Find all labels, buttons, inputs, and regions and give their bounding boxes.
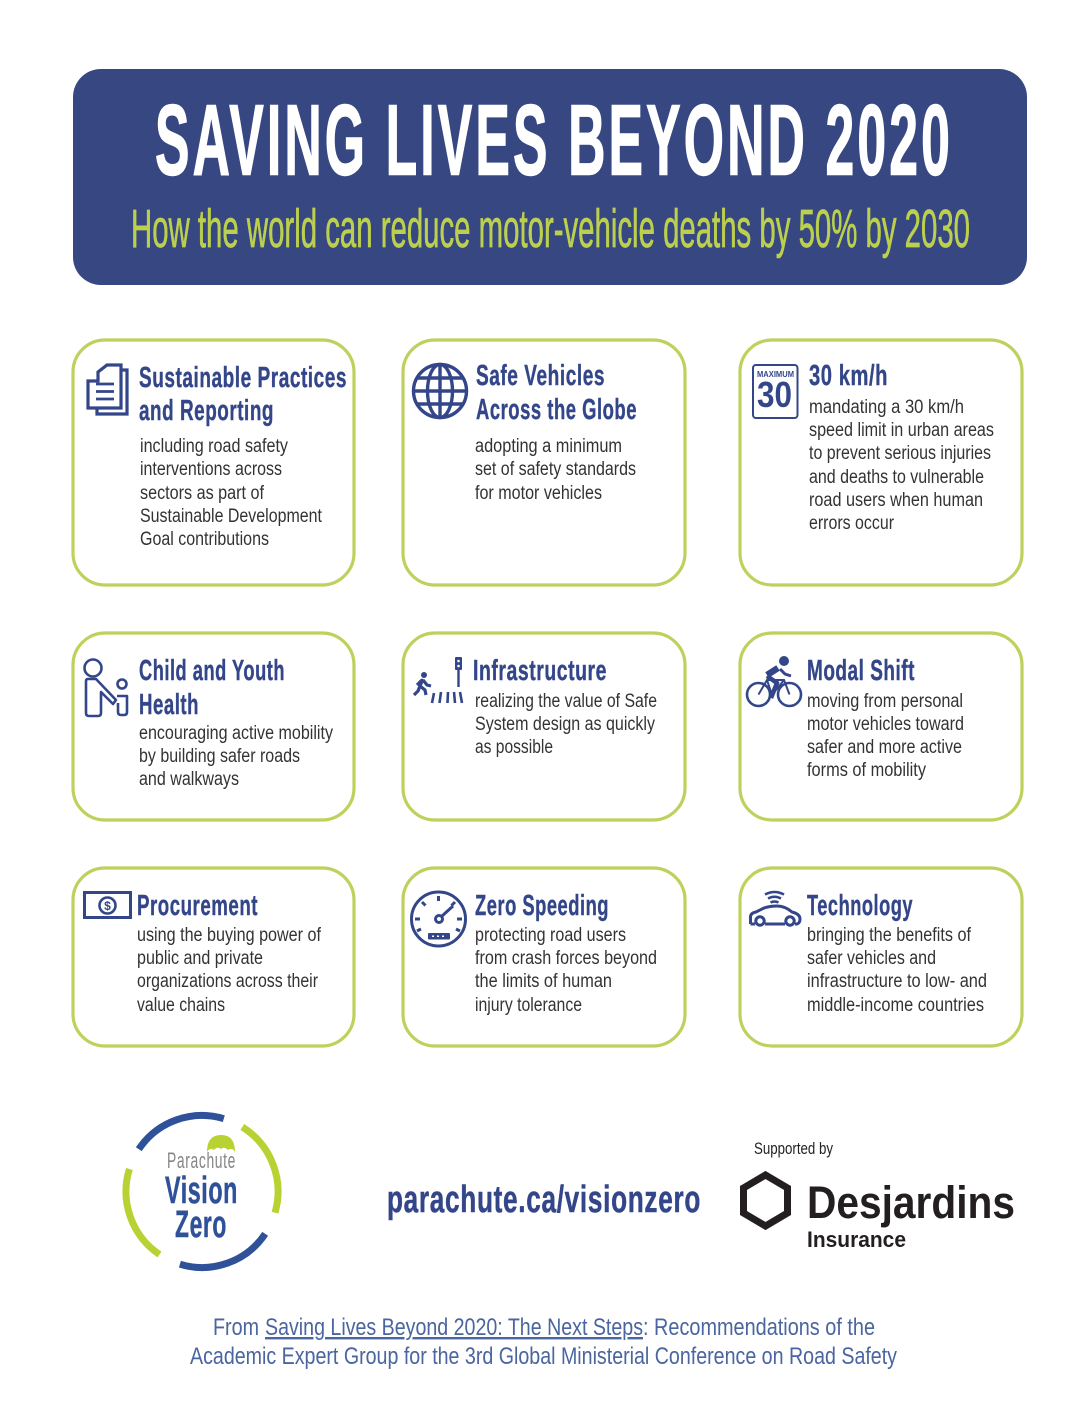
body text: forms of mobility (807, 760, 926, 781)
logo: Parachute Vision Zero (126, 1115, 278, 1268)
body text (475, 436, 636, 504)
body text (809, 397, 994, 534)
heading: Procurement (137, 890, 258, 922)
body text: infrastructure to low- and (807, 971, 987, 992)
body text: speed limit in urban areas (809, 420, 994, 441)
sponsor: Desjardins Insurance: Insurance (807, 1227, 906, 1252)
body text: injury tolerance (475, 995, 582, 1016)
source citation (190, 1314, 897, 1370)
heading: Technology (807, 890, 913, 922)
heading: Safe Vehicles (476, 360, 605, 392)
panel: modal shift (740, 633, 1022, 820)
panel: infrastructure (403, 633, 685, 820)
body text: realizing the value of Safe (475, 691, 657, 712)
source citation: From (213, 1314, 259, 1341)
heading: Health (139, 689, 199, 721)
icon: banknote: $ (104, 899, 111, 913)
body text: interventions across (140, 459, 282, 480)
heading (139, 655, 285, 721)
body text: for motor vehicles (475, 483, 602, 504)
icon: documents (88, 365, 127, 414)
panel: zero speeding (403, 868, 685, 1046)
icon: maximum 30 sign: MAXIMUM (757, 370, 794, 379)
body text: organizations across their (137, 971, 319, 992)
icon: speedometer (412, 892, 466, 946)
body text (139, 723, 333, 790)
logo: Parachute Vision Zero: Zero (175, 1204, 227, 1246)
logo: Parachute Vision Zero: Vision (165, 1170, 238, 1212)
heading: and Reporting (139, 395, 274, 427)
body text: adopting a minimum (475, 436, 622, 457)
logo: Parachute Vision Zero: Parachute (167, 1148, 236, 1173)
heading: Infrastructure (473, 655, 607, 687)
source citation: Saving Lives Beyond 2020: The Next Steps (265, 1314, 643, 1341)
body text: and deaths to vulnerable (809, 467, 984, 488)
panel: sustainable practices and reporting (73, 340, 354, 585)
icon: maximum 30 sign (753, 365, 798, 418)
body text (140, 436, 323, 550)
heading (139, 362, 347, 427)
heading (476, 360, 637, 426)
source citation: Academic Expert Group for the 3rd Global Ministerial Conference on Road Safety (190, 1343, 897, 1370)
panel: 30 km/h (740, 340, 1022, 585)
body text (807, 925, 987, 1016)
body text: safer and more active (807, 737, 962, 758)
body text: the limits of human (475, 971, 612, 992)
icon: cyclist (747, 656, 801, 706)
panel: safe vehicles across the globe (403, 340, 685, 585)
icon: globe (413, 364, 467, 418)
icon: pedestrian crossing and signal (414, 657, 462, 703)
website link: parachute.ca/visionzero (387, 1179, 701, 1221)
heading: 30 km/h (809, 360, 888, 392)
heading: Across the Globe (476, 394, 637, 426)
body text: Goal contributions (140, 529, 269, 550)
panel: title banner (73, 69, 1027, 285)
body text: road users when human (809, 490, 983, 511)
body text: System design as quickly (475, 714, 655, 735)
body text (807, 691, 964, 781)
panel: child and youth health (73, 633, 354, 820)
body text: motor vehicles toward (807, 714, 964, 735)
body text: including road safety (140, 436, 288, 457)
panel: procurement (73, 868, 354, 1046)
body text: to prevent serious injuries (809, 443, 991, 464)
icon: adult and child (84, 660, 127, 716)
body text (137, 925, 322, 1016)
body text (475, 925, 657, 1016)
body text: as possible (475, 737, 553, 758)
icon: connected car (750, 892, 800, 925)
icon: banknote (84, 892, 130, 918)
body text: using the buying power of (137, 925, 322, 946)
sponsor: Desjardins Insurance: Desjardins (807, 1177, 1015, 1228)
body text: encouraging active mobility (139, 723, 333, 744)
body text: bringing the benefits of (807, 925, 972, 946)
body text: safer vehicles and (807, 948, 936, 969)
body text (475, 691, 657, 758)
body text: middle-income countries (807, 995, 984, 1016)
body text: by building safer roads (139, 746, 300, 767)
icon: maximum 30 sign: 30 (757, 374, 792, 415)
body text: moving from personal (807, 691, 963, 712)
body text: and walkways (139, 769, 239, 790)
body text: sectors as part of (140, 483, 265, 504)
body text: protecting road users (475, 925, 626, 946)
sponsor: Desjardins Insurance (744, 1139, 1015, 1252)
sponsor: Desjardins Insurance: Supported by (754, 1139, 833, 1158)
body text: from crash forces beyond (475, 948, 657, 969)
body text: public and private (137, 948, 263, 969)
source citation: : Recommendations of the (643, 1314, 875, 1341)
body text: mandating a 30 km/h (809, 397, 964, 418)
heading: Child and Youth (139, 655, 285, 687)
panel: technology (740, 868, 1022, 1046)
heading: Sustainable Practices (139, 362, 347, 394)
body text: value chains (137, 995, 225, 1016)
body text: errors occur (809, 513, 895, 534)
heading: Modal Shift (807, 655, 915, 687)
body text: set of safety standards (475, 459, 636, 480)
heading: Zero Speeding (475, 890, 609, 922)
body text: Sustainable Development (140, 506, 323, 527)
